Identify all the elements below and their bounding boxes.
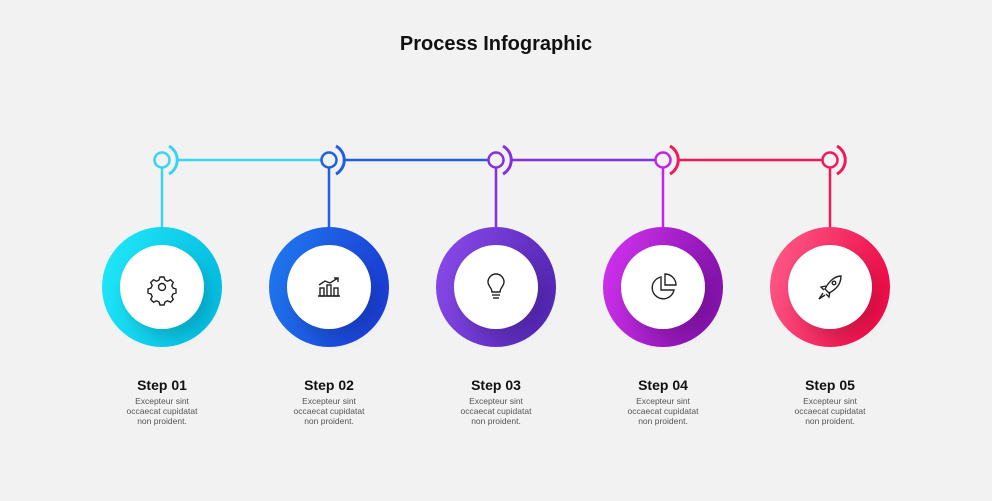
step 3: non proident. [471, 416, 521, 426]
step 5: Excepteur sint [803, 396, 858, 406]
step 2: Excepteur sint [302, 396, 357, 406]
step 3: Step 03 [471, 377, 521, 393]
step 2 [269, 146, 389, 426]
step 4: occaecat cupidatat [628, 406, 699, 416]
step 5: Step 05 [805, 377, 855, 393]
step 2: occaecat cupidatat [294, 406, 365, 416]
step 1: Step 01 [137, 377, 187, 393]
step 3: occaecat cupidatat [461, 406, 532, 416]
step 2: non proident. [304, 416, 354, 426]
step 1: Excepteur sint [135, 396, 190, 406]
step 3 [436, 146, 556, 426]
step 4: non proident. [638, 416, 688, 426]
step 1: occaecat cupidatat [127, 406, 198, 416]
step 5 [770, 146, 890, 426]
title: Process Infographic [400, 33, 592, 55]
step 5: non proident. [805, 416, 855, 426]
step 1 [102, 146, 222, 426]
step 3: Excepteur sint [469, 396, 524, 406]
step 2: Step 02 [304, 377, 354, 393]
step 4: Excepteur sint [636, 396, 691, 406]
step 4 [603, 146, 723, 426]
icon: bar chart [318, 278, 340, 296]
icon: bulb [488, 274, 504, 298]
step 1: non proident. [137, 416, 187, 426]
icon: rocket [819, 276, 841, 299]
icon: pie chart [652, 274, 676, 299]
icon: gear [148, 277, 176, 305]
step 5: occaecat cupidatat [795, 406, 866, 416]
step 4: Step 04 [638, 377, 688, 393]
connector lines [178, 159, 822, 161]
